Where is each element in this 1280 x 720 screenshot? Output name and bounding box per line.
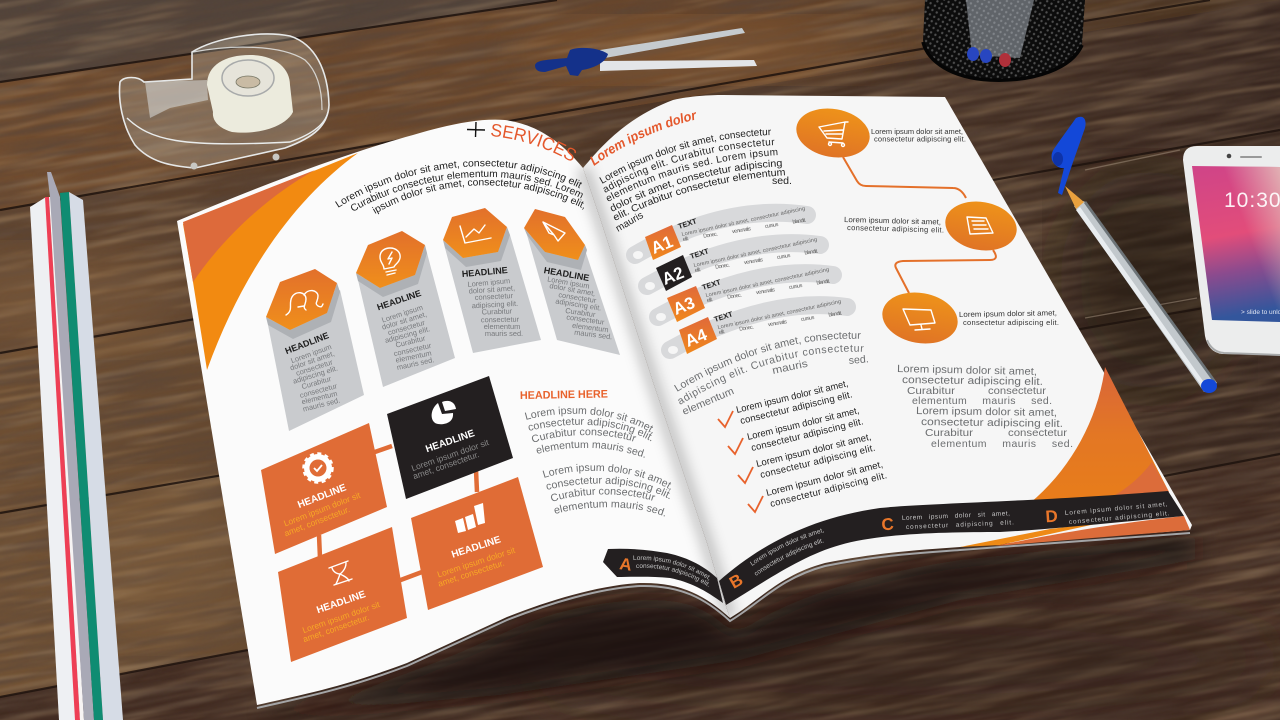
tape dispenser [120,34,329,169]
left page paragraph one: elementum mauris sed. [536,441,645,458]
feature card 2: idea: dolor sit amet, [381,310,428,332]
box: orange bars: Lorem ipsum dolor sit [436,545,517,579]
feature card 2: idea: mauris sed. [396,355,435,372]
left page paragraph two: Lorem ipsum dolor sit amet, [542,464,672,491]
feature card 1: team: Lorem ipsum [290,342,333,365]
icon: line chart [460,225,491,243]
list item A3: Lorem ipsum dolor sit amet, consectetur adipiscing [705,267,830,299]
box: dark pie chart: HEADLINE [424,428,476,455]
box: orange badge: amet, consectetur. [283,504,351,538]
feature card 4: paper plane: consectetur [558,290,597,305]
timeline connector [843,157,996,293]
timeline node: monitor: Lorem ipsum dolor sit amet, [959,308,1057,319]
footer band B C D: Lorem ipsum dolor sit amet, [750,528,824,566]
left page paragraph one [524,406,653,458]
right page gray paragraph: mauris [771,358,809,377]
timeline node: document: consectetur adipiscing elit. [847,223,944,235]
connectors between boxes [319,446,477,581]
right page lower paragraph: Lorem ipsum dolor sit amet, [916,405,1057,419]
right page lower paragraph: Curabitur [907,385,956,397]
right page intro paragraph: dolor sit amet, consectetur adipiscing [610,160,782,212]
feature card 3: chart [443,208,541,353]
services title text: SERVICES [491,124,576,161]
right page gray paragraph: adipiscing elit. Curabitur consectetur [678,344,864,404]
feature card 3: chart: Lorem ipsum [467,276,510,289]
feature card 3: chart: consectetur [475,291,514,302]
right page lower paragraph: Curabitur [925,427,974,439]
icon: people [286,291,323,315]
checklist: consectetur adipiscing elit. [769,470,888,510]
box: orange bars [411,477,543,610]
list item A3: TEXT [701,277,722,292]
checklist: consectetur adipiscing elit. [739,389,854,427]
right page gray paragraph: elementum [680,385,736,418]
right page lower paragraph: consectetur [1008,427,1068,439]
left page paragraph one: Lorem ipsum dolor sit amet, [524,406,653,434]
footer band B C D: D [1045,507,1058,526]
timeline node: document: Lorem ipsum dolor sit amet, [844,215,941,227]
footer band B C D: consectetur adipiscing elit. [1069,510,1170,526]
list item A4: elit. Donec. venenatis cursus blandit. [718,310,843,336]
timeline node: monitor [878,287,1059,349]
right page lower paragraph: elementum mauris sed. [931,438,1073,450]
feature card 4: paper plane: HEADLINE [543,265,590,283]
feature card 4: paper plane [524,209,620,355]
feature card 2: idea [356,231,455,387]
box: orange badge: Lorem ipsum dolor sit [282,490,362,528]
icon: pie chart [432,401,456,424]
box: dark pie chart: amet, consectetur. [412,449,480,481]
box: orange hourglass: HEADLINE [315,589,367,616]
checklist: Lorem ipsum dolor sit amet, [735,378,850,416]
feature card 1: team: consectetur [299,381,338,400]
icon: gear badge [304,454,332,482]
box: orange bars: amet, consectetur. [437,558,506,589]
right page intro paragraph: mauris [614,210,645,235]
icon: bars [455,503,485,533]
left page paragraph two: elementum mauris sed. [554,501,665,516]
right page intro paragraph [599,129,792,235]
intro text left page: Curabitur consectetur elementum mauris sed. Lorem [351,170,583,211]
list item A1: Lorem ipsum dolor sit amet, consectetur adipiscing [681,206,806,238]
footer band B C D: Lorem ipsum dolor sit amet, [902,510,1010,522]
footer band B C D: B [726,570,746,593]
right page intro paragraph: sed. [772,176,792,187]
right page intro paragraph: Lorem ipsum dolor sit amet, consectetur [599,129,771,184]
list item A1: TEXT [677,216,698,231]
list item A2: A2 [659,263,687,289]
list item A4: TEXT [713,309,734,324]
feature card 2: idea: elementum [395,348,432,365]
pencil cup [923,0,1085,81]
ruler [30,172,123,720]
icon: light bulb [380,248,400,275]
right page corner swoosh [960,367,1190,547]
list item A2 [645,237,820,291]
box: orange badge: HEADLINE [296,482,348,511]
feature card 1: team: Curabitur [300,374,333,391]
list item A1 [633,206,807,260]
list item A2: TEXT [689,246,710,261]
feature card 4: paper plane: consectetur [566,312,605,327]
right page lower paragraph: consectetur [988,385,1047,397]
list item A1: A1 [648,232,676,258]
intro text left page: ipsum dolor sit amet, consectetur adipiscing elit, [372,180,584,214]
left page paragraph two: consectetur adipiscing elit. [546,476,670,500]
feature card 1: team: dolor sit amet, [289,349,336,372]
list item A3: A3 [670,293,698,319]
left page paragraph two: Curabitur consectetur [550,488,656,502]
feature card 4: paper plane: mauris sed. [574,328,613,341]
page thickness [257,533,1190,708]
feature card 3: chart: Curabitur [482,306,513,317]
services heading [467,122,576,161]
right page intro paragraph: adipiscing elit. Curabitur consectetur [604,139,774,192]
checklist [718,378,888,512]
feature card 2: idea: consectetur [387,318,426,337]
left page paragraph one: Curabitur consectetur [532,428,636,442]
right page lower paragraph: consectetur adipiscing elit. [902,374,1043,388]
box: dark pie chart [387,376,513,499]
feature card 2: idea: Curabitur [395,333,427,350]
list item A3 [656,267,833,322]
box: orange hourglass: amet, consectetur. [302,612,370,644]
right page lower paragraph: Lorem ipsum dolor sit amet, [897,363,1037,378]
timeline node: monitor: consectetur adipiscing elit. [963,318,1059,327]
box: orange badge [261,423,387,554]
feature card 4: paper plane: Lorem ipsum [547,274,590,291]
list item A4 [668,299,847,354]
right page gray paragraph: sed. [848,353,869,367]
list item A4: A4 [682,325,710,351]
list item A2: Lorem ipsum dolor sit amet, consectetur adipiscing [693,237,818,269]
list item A4: Lorem ipsum dolor sit amet, consectetur adipiscing [717,299,842,331]
pen with blue cap [1052,117,1217,393]
right page gray paragraph: Lorem ipsum dolor sit amet, consectetur [674,332,861,392]
left page corner swoosh [183,153,358,370]
feature card 2: idea: Lorem ipsum [381,303,424,325]
timeline node: cart: Lorem ipsum dolor sit amet, [871,127,963,136]
box: orange bars: HEADLINE [450,534,503,561]
book shadow [265,535,1195,715]
drawing compass [535,28,757,76]
checklist: Lorem ipsum dolor sit amet, [755,432,872,470]
feature card 1: team: elementum [301,389,338,406]
feature card 3: chart: dolor sit amet, [468,283,515,296]
icon: paper plane [543,222,565,241]
open brochure pages [177,95,1192,705]
left page paragraph one: consectetur adipiscing elit. [528,418,652,442]
feature card 2: idea: consectetur [393,341,433,358]
list item A2: elit. Donec. venenatis cursus blandit. [694,248,819,274]
footer tab A: Lorem ipsum dolor sit amet, [633,556,710,581]
feature card 1: team: mauris sed. [302,396,341,414]
phone clock: 10:30 [1224,189,1280,212]
list item A1: elit. Donec. venenatis cursus blandit. [682,217,807,243]
footer band B C D: consectetur adipiscing elit. [754,538,824,576]
box: orange hourglass [278,527,407,662]
right page lower paragraph: consectetur adipiscing elit. [921,416,1063,430]
headline here: HEADLINE HERE [520,388,608,402]
feature card 1: team: HEADLINE [284,330,330,356]
smartphone [1183,146,1280,355]
right page lower paragraph: elementum mauris sed. [912,395,1052,407]
timeline node: document [844,196,1021,256]
box: orange hourglass: Lorem ipsum dolor sit [301,599,382,635]
feature card 1: team [266,269,364,431]
icon: document [967,217,993,234]
footer tab A: A [618,554,633,575]
footer band B C D: consectetur adipiscing elit. [906,519,1014,531]
right page intro paragraph: elit. Curabitur consectetur elementum [614,170,785,220]
right page title: Lorem ipsum dolor [590,112,696,166]
footer tab A: consectetur adipiscing elit. [636,564,709,587]
feature card 3: chart: elementum [484,322,520,331]
left page paragraph two [542,464,672,516]
footer tab A [603,548,723,603]
feature card 1: team: adipiscing elit. [292,364,339,386]
feature card 4: paper plane: elementum [572,321,609,334]
checklist: consectetur adipiscing elit. [750,416,865,454]
feature card 2: idea: adipiscing elit. [384,324,431,345]
timeline node: cart: consectetur adipiscing elit. [874,134,966,144]
checklist: Lorem ipsum dolor sit amet, [765,459,884,499]
icon: monitor [903,309,935,330]
feature card 4: paper plane: adipiscing elit. [555,296,602,313]
timeline node: cart [792,103,966,163]
checklist: consectetur adipiscing elit. [759,443,876,481]
footer band B C D: Lorem ipsum dolor sit amet, [1065,501,1168,517]
feature card 1: team: consectetur [295,357,334,378]
feature card 2: idea: HEADLINE [376,288,422,312]
feature card 3: chart: consectetur [481,315,520,324]
right page lower paragraph [897,363,1073,450]
icon: shopping cart [819,122,848,146]
list item A3: elit. Donec. venenatis cursus blandit. [706,278,831,304]
footer band B C D [719,491,1184,605]
icon: hourglass [329,561,352,585]
feature card 3: chart: HEADLINE [461,265,508,279]
feature card 4: paper plane: dolor sit amet, [549,281,596,298]
feature card 3: chart: mauris sed. [485,329,523,338]
box: dark pie chart: Lorem ipsum dolor sit [410,437,491,473]
checklist: Lorem ipsum dolor sit amet, [746,405,861,443]
feature card 3: chart: adipiscing elit. [471,299,518,310]
footer band B C D: C [881,515,894,534]
feature card 4: paper plane: Curabitur [565,306,597,319]
right page intro paragraph: elementum mauris sed. Lorem ipsum [606,150,778,202]
